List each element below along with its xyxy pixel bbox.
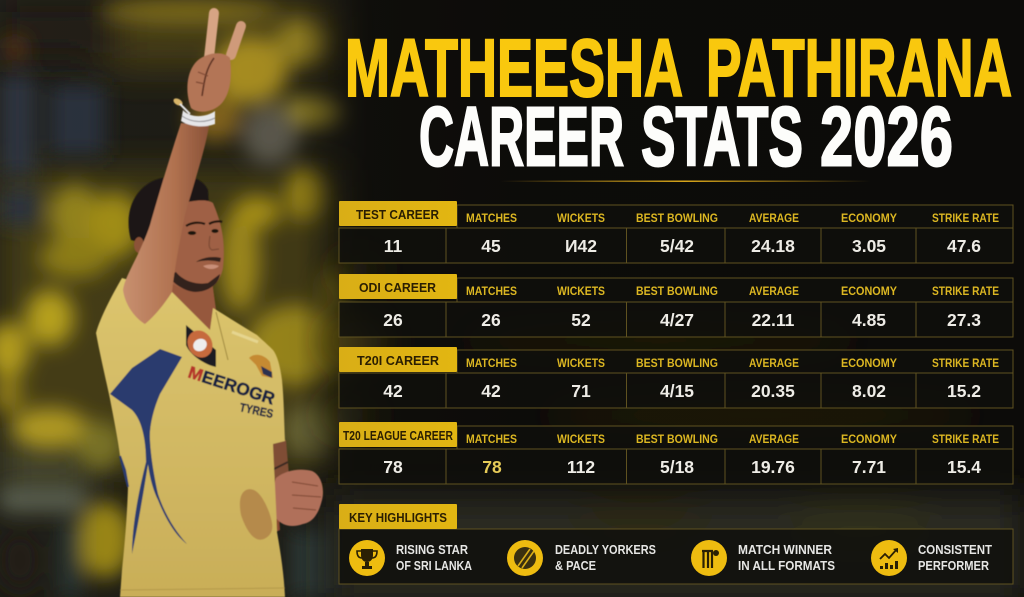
odi career values: 27.3 <box>947 310 981 330</box>
test career column labels: AVERAGE <box>749 213 799 225</box>
test career values: 11 <box>384 236 403 256</box>
t20i career column labels <box>466 358 999 370</box>
t20i career column labels: MATCHES <box>466 358 517 370</box>
test career column labels <box>466 213 999 225</box>
player raised arm <box>123 123 209 324</box>
t20 league career tab: T20 LEAGUE CAREER <box>343 428 453 443</box>
panel: odi career <box>339 274 1013 337</box>
odi career column labels: MATCHES <box>466 286 517 298</box>
odi career column labels: ECONOMY <box>841 286 897 298</box>
highlight: deadly yorkers: & PACE <box>555 559 596 573</box>
odi career column labels <box>466 286 999 298</box>
title <box>345 23 1012 184</box>
shirt badge <box>183 325 217 367</box>
t20 league career column labels: STRIKE RATE <box>932 434 999 446</box>
t20 league career values: 19.76 <box>751 457 795 477</box>
highlight: match winner: IN ALL FORMATS <box>738 559 835 573</box>
test career column labels: STRIKE RATE <box>932 213 999 225</box>
odi career values: 26 <box>383 310 403 330</box>
test career values: 47.6 <box>947 236 981 256</box>
odi career column labels: WICKETS <box>557 286 605 298</box>
player shirt: TYRES <box>238 400 275 421</box>
t20i career values: 71 <box>571 381 591 401</box>
t20 league career tab <box>339 422 457 447</box>
title line: career stats: STATS <box>641 90 803 184</box>
highlight: rising star: OF SRI LANKA <box>396 559 472 573</box>
title line: career stats <box>419 90 953 184</box>
t20 league career values: 78 <box>482 457 502 477</box>
test career column labels: MATCHES <box>466 213 517 225</box>
test career values: 45 <box>481 236 501 256</box>
t20 league career values <box>383 457 981 477</box>
highlight: consistent performer: PERFORMER <box>918 559 989 573</box>
test career tab: TEST CAREER <box>356 207 440 222</box>
highlight: match winner <box>691 540 835 576</box>
odi career column labels: BEST BOWLING <box>636 286 718 298</box>
t20 league career column labels <box>466 434 999 446</box>
player wristband <box>172 97 215 126</box>
player shirt <box>96 278 285 597</box>
highlight: rising star <box>349 540 472 576</box>
panel: key highlights <box>339 504 1013 584</box>
t20i career values: 42 <box>481 381 501 401</box>
player neck <box>165 275 216 332</box>
t20i career tab <box>339 347 457 372</box>
icon: trophy <box>349 540 385 576</box>
test career column labels: BEST BOWLING <box>636 213 718 225</box>
shirt ball mark <box>240 489 272 540</box>
t20i career tab: T20I CAREER <box>357 353 440 368</box>
t20i career column labels: BEST BOWLING <box>636 358 718 370</box>
odi career values: 4/27 <box>660 310 694 330</box>
t20i career values <box>383 381 981 401</box>
odi career tab: ODI CAREER <box>359 280 437 295</box>
t20 league career values: 7.71 <box>852 457 886 477</box>
t20 league career column labels: ECONOMY <box>841 434 897 446</box>
highlight: consistent performer <box>871 540 992 576</box>
odi career values: 26 <box>481 310 501 330</box>
t20 league career column labels: AVERAGE <box>749 434 799 446</box>
test career column labels: WICKETS <box>557 213 605 225</box>
odi career column labels: STRIKE RATE <box>932 286 999 298</box>
key highlights tab <box>339 504 457 529</box>
icon: growth chart <box>871 540 907 576</box>
title line: career stats: CAREER <box>419 90 624 184</box>
test career values <box>384 236 981 256</box>
odi career tab <box>339 274 457 299</box>
odi career values: 4.85 <box>852 310 886 330</box>
panel: t20 league career <box>339 422 1013 484</box>
odi career column labels: AVERAGE <box>749 286 799 298</box>
panel: test career <box>339 201 1013 263</box>
test career tab <box>339 201 457 226</box>
panel: t20i career <box>339 347 1013 408</box>
title line: player name: MATHEESHA <box>345 23 683 114</box>
player figure celebrating with raised victory sign <box>96 13 323 597</box>
t20 league career column labels: MATCHES <box>466 434 517 446</box>
highlight: match winner: MATCH WINNER <box>738 543 832 557</box>
highlight: consistent performer: CONSISTENT <box>918 543 992 557</box>
t20 league career column labels: WICKETS <box>557 434 605 446</box>
player raised fingers and hand <box>187 13 241 112</box>
test career values: 24.18 <box>751 236 795 256</box>
odi career values: 52 <box>571 310 591 330</box>
t20i career values: 4/15 <box>660 381 694 401</box>
t20i career column labels: STRIKE RATE <box>932 358 999 370</box>
t20 league career values: 78 <box>383 457 403 477</box>
t20i career column labels: WICKETS <box>557 358 605 370</box>
highlight: deadly yorkers: DEADLY YORKERS <box>555 543 656 557</box>
highlight: deadly yorkers <box>507 540 656 576</box>
t20i career column labels: AVERAGE <box>749 358 799 370</box>
t20 league career values: 112 <box>567 457 595 477</box>
test career values: 5/42 <box>660 236 694 256</box>
shirt lion crest <box>249 355 273 378</box>
t20 league career values: 15.4 <box>947 457 981 477</box>
key highlights tab: KEY HIGHLIGHTS <box>349 510 447 525</box>
t20 league career column labels: BEST BOWLING <box>636 434 718 446</box>
player right forearm and fist <box>262 440 323 535</box>
player head <box>129 176 224 292</box>
shirt sponsor text: MEEROGR <box>186 363 277 409</box>
test career column labels: ECONOMY <box>841 213 897 225</box>
icon: stumps and ball <box>691 540 727 576</box>
t20i career values: 15.2 <box>947 381 981 401</box>
odi career values: 22.11 <box>752 310 795 330</box>
t20i career values: 20.35 <box>751 381 795 401</box>
shirt blue panel <box>110 349 187 554</box>
t20i career column labels: ECONOMY <box>841 358 897 370</box>
highlight: rising star: RISING STAR <box>396 543 468 557</box>
t20i career values: 8.02 <box>852 381 886 401</box>
title line: career stats: 2026 <box>820 90 953 184</box>
odi career values <box>383 310 981 330</box>
t20i career values: 42 <box>383 381 403 401</box>
test career values: 3.05 <box>852 236 886 256</box>
t20 league career values: 5/18 <box>660 457 694 477</box>
icon: cricket ball <box>507 540 543 576</box>
test career values: И42 <box>565 236 597 256</box>
